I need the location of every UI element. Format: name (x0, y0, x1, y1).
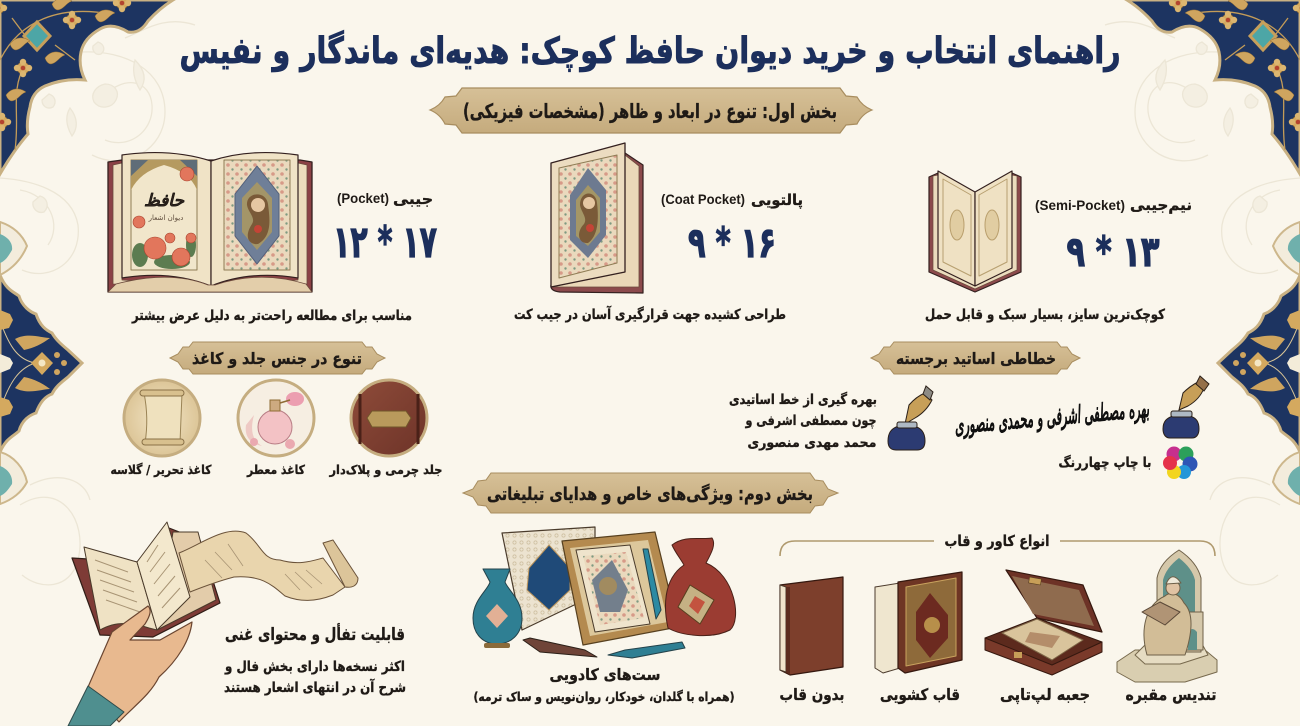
illustration: open pocket book: حافظ (144, 191, 184, 211)
section banner: physical specs: بخش اول: تنوع در ابعاد و ظاهر (مشخصات فیزیکی) (463, 99, 837, 123)
section banner: special features (463, 473, 838, 513)
ornament: left medallion (0, 222, 90, 585)
ornament: top-right corner (1105, 0, 1300, 273)
bracket heading (780, 532, 1215, 556)
text: calligraphers note: محمد مهدی منصوری (748, 435, 876, 451)
panel: fortune telling (68, 522, 406, 726)
number: pocket dimensions: ۱۲ * ۱۷ (333, 217, 437, 268)
icon: writing paper scroll (124, 380, 200, 456)
panel: cover types (780, 532, 1217, 705)
illustration: hand, book and scroll (68, 522, 358, 726)
text: calligraphers note: بهره گیری از خط اساتیدی (729, 391, 877, 408)
illustration: plain book (780, 577, 843, 675)
icon: pen and ink, left (888, 386, 933, 450)
caption: gift sets: ست‌های کادویی (550, 665, 660, 684)
captions: جعبه لپ‌تاپی (1000, 685, 1090, 705)
label: pocket (337, 190, 433, 208)
label: semi-pocket (1035, 196, 1192, 214)
panel: master calligraphers (729, 342, 1209, 479)
label: semi-pocket: نیم‌جیبی (1130, 196, 1192, 214)
icon: perfumed paper (238, 380, 314, 456)
label: semi-pocket: (Semi-Pocket) (1035, 197, 1125, 213)
label: coat pocket (661, 191, 803, 210)
ornament: top-left corner (0, 0, 195, 273)
banner: materials (170, 342, 385, 374)
caption: leather: جلد چرمی و پلاک‌دار (329, 462, 442, 477)
caption: writing paper: کاغذ تحریر / گلاسه (110, 462, 212, 477)
label: coat pocket: (Coat Pocket) (661, 191, 745, 207)
text: fortune description: شرح آن در انتهای اشعار هستند (224, 678, 406, 696)
ornament: right medallion (1210, 222, 1300, 585)
illustration: semi-pocket book (929, 171, 1021, 292)
banner: materials: تنوع در جنس جلد و کاغذ (192, 349, 362, 368)
caption: gift set contents: (همراه با گلدان، خودکار، روان‌نویس و ساک ترمه) (474, 689, 734, 704)
illustration: laptop box (985, 570, 1102, 675)
illustration: slipcase (875, 572, 962, 673)
caption: perfumed paper: کاغذ معطر (246, 462, 306, 477)
label: coat pocket: پالتویی (751, 191, 803, 210)
text: calligraphers note: چون مصطفی اشرفی و (745, 413, 876, 429)
description: semi-pocket: کوچک‌ترین سایز، بسیار سبک و قابل حمل (925, 307, 1166, 323)
icon: four colour print (1163, 446, 1198, 479)
banner: calligraphers: خطاطی اساتید برجسته (896, 349, 1056, 368)
section banner: physical specs (430, 88, 872, 133)
icon: pen and ink, right (1163, 376, 1209, 438)
description: coat pocket: طراحی کشیده جهت قرارگیری آسان در جیب کت (514, 305, 786, 323)
panel: semi-pocket size (925, 171, 1192, 323)
label: pocket: (Pocket) (337, 190, 389, 206)
section banner: special features: بخش دوم: ویژگی‌های خاص و هدایای تبلیغاتی (487, 483, 813, 505)
icon: leather cover with plaque (351, 380, 427, 456)
illustration: statue tomb (1117, 550, 1217, 682)
label: pocket: جیبی (393, 190, 433, 208)
number: coat pocket dimensions: ۹ * ۱۶ (688, 218, 776, 267)
illustration: coat pocket book (551, 143, 643, 293)
captions: قاب کشویی (880, 685, 960, 704)
heading: fortune telling: قابلیت تفأل و محتوای غنی (225, 623, 405, 645)
captions: تندیس مقبره (1126, 685, 1216, 704)
bracket heading: انواع کاور و قاب (944, 532, 1050, 550)
illustration: open pocket book (108, 153, 312, 292)
panel: coat pocket size (514, 143, 803, 323)
panel: cover and paper materials (110, 342, 442, 477)
panel: pocket size (108, 153, 437, 324)
panel: gift sets (473, 527, 736, 704)
captions: بدون قاب (780, 685, 844, 704)
text: fortune description: اکثر نسخه‌ها دارای بخش فال و (224, 659, 405, 675)
illustration: open pocket book: دیوان اشعار (148, 214, 183, 222)
illustration: gift set (473, 527, 736, 658)
description: pocket: مناسب برای مطالعه راحت‌تر به دلیل عرض بیشتر (131, 308, 412, 324)
text: fortune description (224, 659, 406, 696)
caption: four colour: با چاپ چهاررنگ (1058, 454, 1152, 471)
number: semi-pocket dimensions: ۹ * ۱۳ (1066, 227, 1160, 276)
text: calligraphers note (729, 391, 877, 451)
banner: calligraphers (871, 342, 1080, 374)
captions (780, 685, 1216, 705)
